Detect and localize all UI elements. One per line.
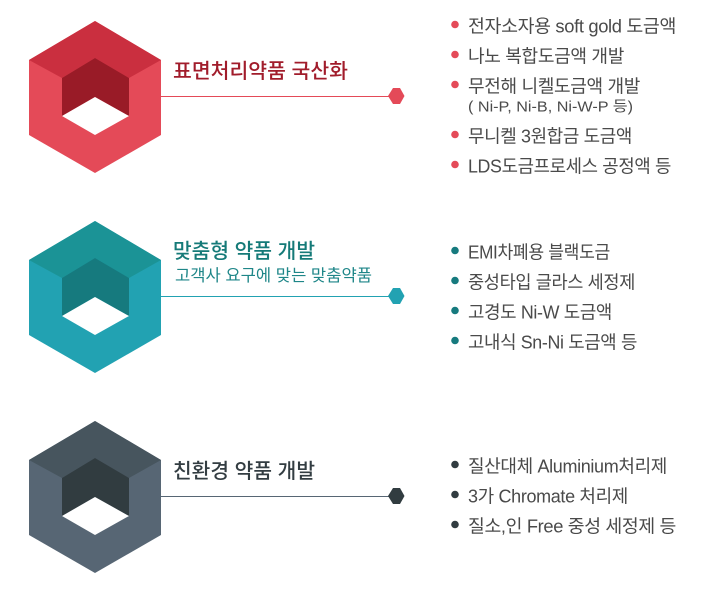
connector line: red xyxy=(161,96,390,98)
icon: small teal hexagon xyxy=(388,288,404,304)
icon: small slate hexagon xyxy=(388,488,404,504)
connector line: teal xyxy=(161,296,390,298)
list: surface treatment items: 전자소자용 soft gold 도금액 xyxy=(468,16,676,36)
panel: eco-friendly chemicals xyxy=(29,421,676,573)
panel: custom chemicals xyxy=(29,221,637,373)
heading: custom chemicals: 맞춤형 약품 개발 xyxy=(173,240,315,263)
list: custom chemical items: 고내식 Sn-Ni 도금액 등 xyxy=(468,332,637,352)
list: surface treatment items: ( Ni-P, Ni-B, Ni-W-P 등) xyxy=(468,100,633,116)
heading: eco-friendly: 친환경 약품 개발 xyxy=(173,460,315,483)
list: surface treatment items: 나노 복합도금액 개발 xyxy=(468,46,624,66)
icon: slate hexagon cube xyxy=(29,421,161,573)
list: custom chemical items xyxy=(451,242,637,352)
heading: surface treatment: 표면처리약품 국산화 xyxy=(173,60,348,83)
list: eco-friendly items: 3가 Chromate 처리제 xyxy=(468,486,628,506)
list: surface treatment items: 무니켈 3원합금 도금액 xyxy=(468,126,632,146)
list: eco-friendly items xyxy=(451,456,676,536)
list: surface treatment items: 무전해 니켈도금액 개발 xyxy=(468,76,640,96)
list: custom chemical items: EMI차폐용 블랙도금 xyxy=(468,242,610,262)
connector line: slate xyxy=(161,496,390,498)
panel: surface treatment chemicals xyxy=(29,16,676,176)
list: surface treatment items: LDS도금프로세스 공정액 등 xyxy=(468,156,671,176)
list: surface treatment items xyxy=(451,16,676,176)
list: custom chemical items: 중성타입 글라스 세정제 xyxy=(468,272,635,292)
subheading: custom chemicals: 고객사 요구에 맞는 맞춤약품 xyxy=(175,266,372,285)
list: custom chemical items: 고경도 Ni-W 도금액 xyxy=(468,302,612,322)
icon: red hexagon cube xyxy=(29,21,161,173)
list: eco-friendly items: 질산대체 Aluminium처리제 xyxy=(468,456,667,476)
icon: small red hexagon xyxy=(388,88,404,104)
icon: teal hexagon cube xyxy=(29,221,161,373)
list: eco-friendly items: 질소,인 Free 중성 세정제 등 xyxy=(468,516,676,536)
